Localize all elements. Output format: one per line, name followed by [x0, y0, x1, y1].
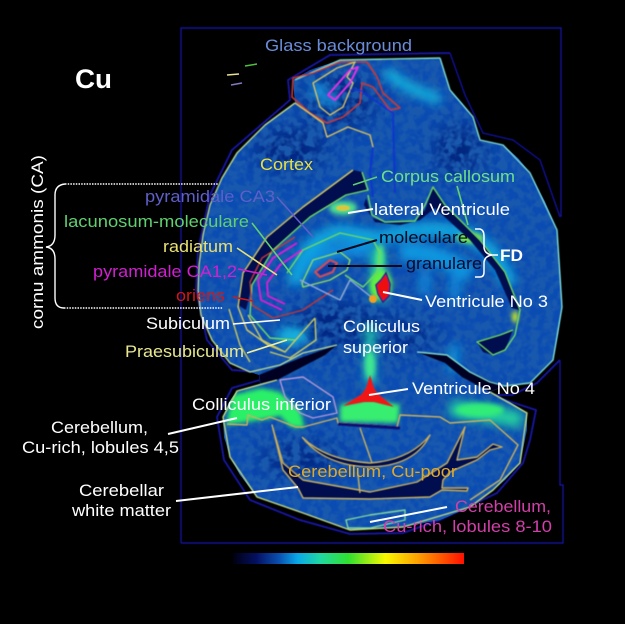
olfactory region yellow outline — [313, 62, 355, 115]
label: radiatum: radiatum — [163, 237, 233, 256]
cerebellum arc — [302, 435, 430, 467]
right ventricle pocket — [477, 330, 513, 355]
label: colliculus superior: superior — [343, 338, 408, 357]
low copper regions — [255, 75, 485, 475]
label: ventricule no 3: Ventricule No 3 — [425, 292, 548, 311]
brain section heat map — [198, 58, 562, 530]
oriens contour — [250, 237, 333, 318]
cortex boundary — [295, 103, 373, 147]
cerebellum white matter — [272, 425, 502, 499]
label: cerebellum Cu-rich lobules 8-10: Cu-rich, lobules 8-10 — [383, 517, 552, 536]
label: colliculus superior: Colliculus — [343, 317, 420, 336]
label: lacunosum-moleculare: lacunosum-moleculare — [64, 212, 249, 231]
hippocampal field contours — [287, 233, 380, 287]
label: oriens: oriens — [176, 286, 225, 305]
label: pyramidale CA1,2: pyramidale CA1,2 — [93, 262, 237, 281]
label: colliculus inferior: Colliculus inferior — [192, 395, 331, 414]
fourth ventricle base band — [338, 424, 400, 428]
noise texture — [199, 60, 562, 530]
label: praesubiculum: Praesubiculum — [125, 342, 244, 361]
cerebellum outer contour — [223, 380, 527, 530]
lateral ventricle — [364, 187, 520, 310]
glass slide frame and outer contour — [181, 28, 563, 543]
corpus callosum outlines — [238, 170, 353, 352]
label: granulare: granulare — [406, 254, 482, 273]
corpus callosum left slit — [238, 170, 367, 310]
label: pyramidale CA3: pyramidale CA3 — [145, 187, 275, 206]
label: corpus callosum: Corpus callosum — [381, 167, 515, 186]
label: glass background: Glass background — [265, 36, 412, 55]
infographic canvas — [22, 26, 564, 564]
label: cerebellum Cu-rich lobules 8-10: Cerebellum, — [455, 497, 551, 516]
label: cerebellar white matter: Cerebellar — [79, 481, 164, 500]
label: cornu ammonis (CA): cornu ammonis (CA) — [28, 155, 47, 329]
dark slits: ventricles and white matter — [238, 170, 520, 499]
upper contour — [295, 58, 440, 80]
label: subiculum: Subiculum — [146, 314, 230, 333]
label: cortex: Cortex — [260, 155, 314, 174]
hot spot in lateral ventricle — [336, 205, 350, 211]
medial blue line — [350, 90, 395, 197]
label: ventricule no 4: Ventricule No 4 — [412, 379, 535, 398]
hot spot under third ventricle — [369, 295, 377, 303]
colliculus and lobule 4,5 green zone — [226, 201, 518, 428]
label: cerebellum Cu-rich lobules 4,5: Cu-rich, lobules 4,5 — [22, 438, 179, 457]
pyramidale band — [258, 243, 302, 310]
cyan outer contour — [417, 58, 562, 386]
olfactory region red outline — [292, 62, 400, 123]
registration dashes — [227, 64, 257, 85]
label: cerebellar white matter: white matter — [71, 501, 171, 520]
FD bracket — [475, 229, 498, 277]
label: FD: FD — [500, 246, 523, 265]
label: lateral ventricule: lateral Ventricule — [374, 200, 510, 219]
third ventricle — [376, 273, 390, 302]
labels — [22, 36, 552, 536]
brain contour lines — [198, 58, 562, 530]
lobules 8-10 contour — [346, 510, 405, 528]
midbrain slit right — [417, 352, 505, 392]
midbrain slit left — [259, 345, 337, 384]
cornu ammonis brace — [46, 184, 223, 308]
right hippocampal contour — [368, 187, 520, 355]
copper rich glows — [276, 72, 522, 420]
fourth ventricle — [343, 375, 394, 407]
copper hot spots — [336, 205, 394, 407]
label: cerebellum Cu-rich lobules 4,5: Cerebellum, — [51, 418, 148, 437]
colliculus inferior outline — [280, 377, 337, 418]
leader lines — [168, 177, 468, 522]
olfactory region magenta band — [328, 67, 358, 100]
label: moleculare: moleculare — [379, 228, 468, 247]
label: cerebellum Cu-poor: Cerebellum, Cu-poor — [288, 462, 457, 481]
tissue base colour — [198, 58, 562, 530]
title: Cu: Cu — [75, 64, 112, 94]
cortex outer contour — [198, 103, 337, 372]
dentate red oval — [315, 260, 337, 277]
subiculum contours — [229, 309, 316, 362]
color scale bar — [233, 553, 464, 564]
cerebellum inner tan lobule lines — [227, 415, 518, 500]
